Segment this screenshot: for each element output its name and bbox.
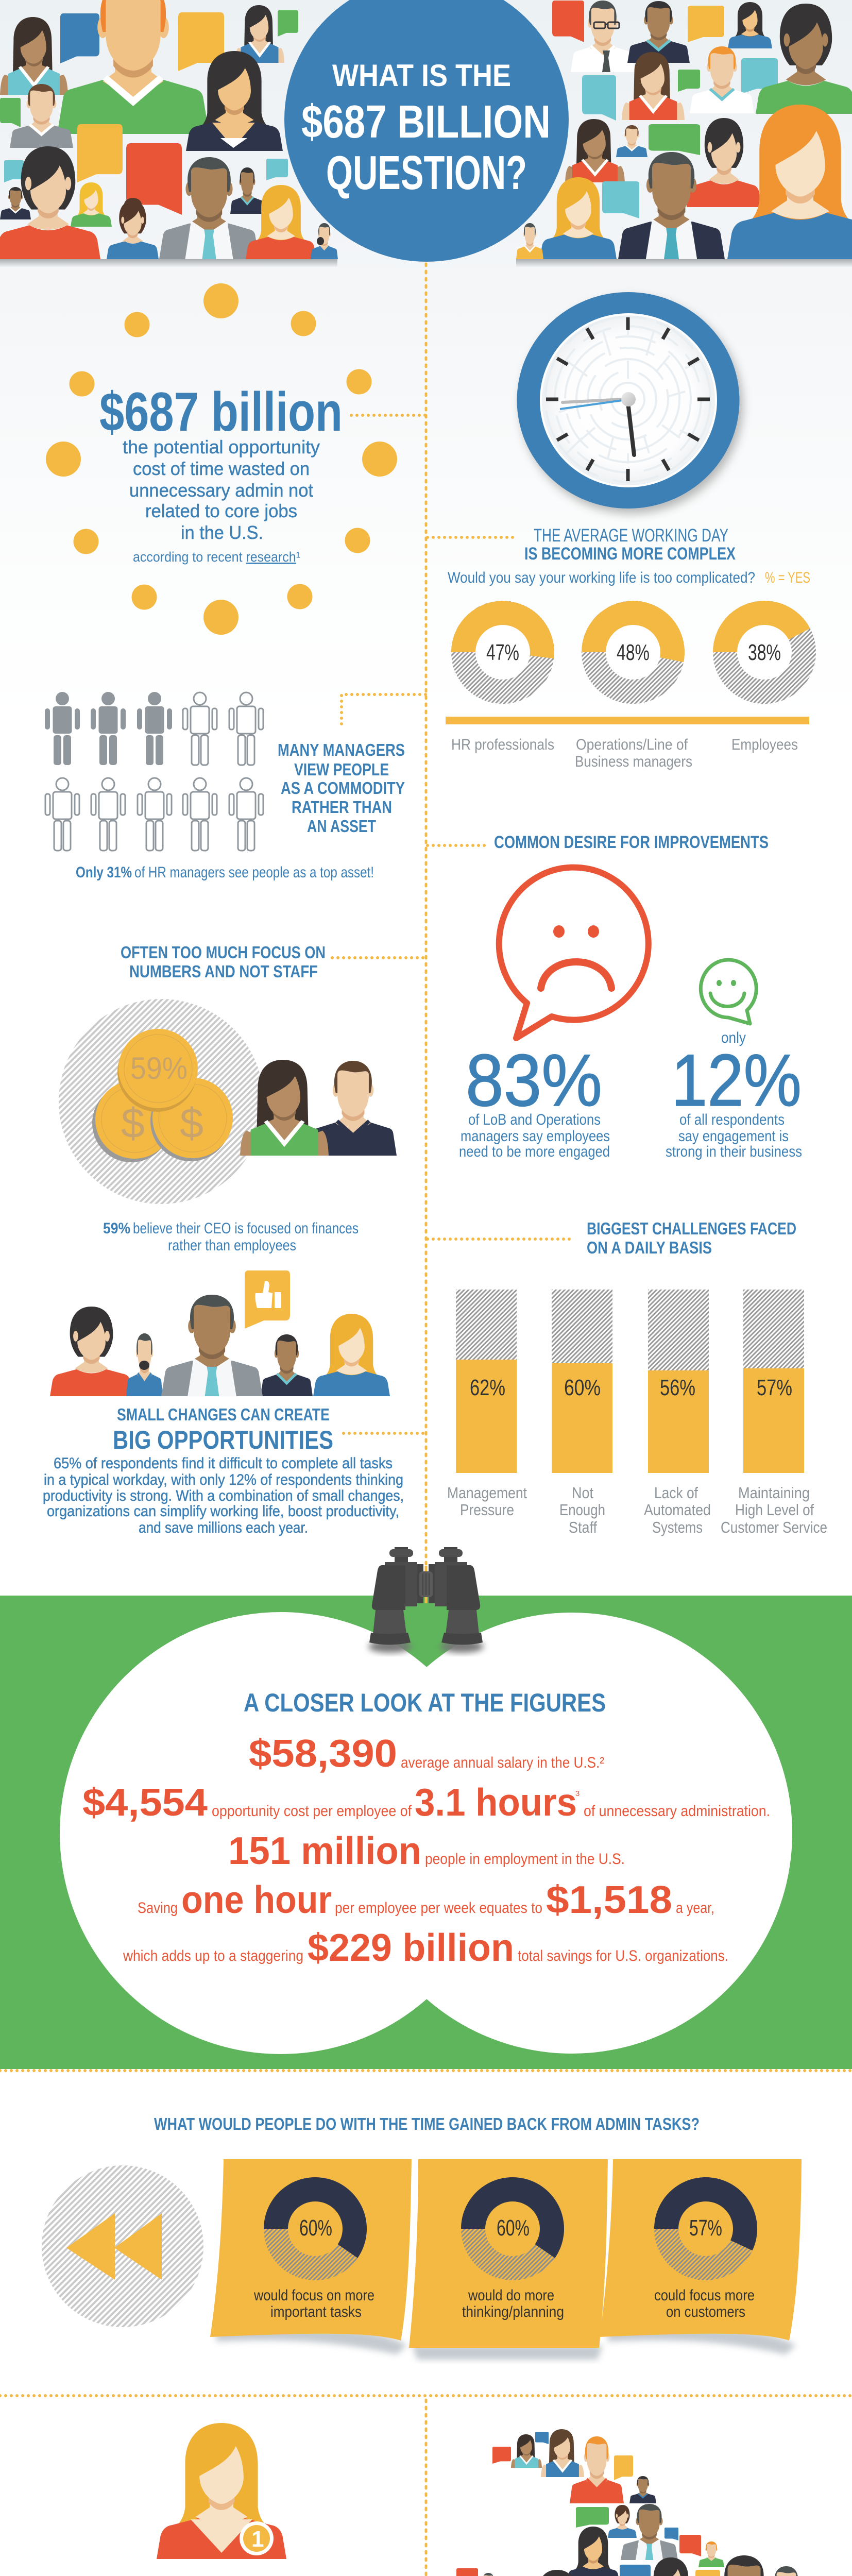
bar: Management Pressure 62%: 62% bbox=[470, 1375, 505, 1400]
chart: daily challenges bars bbox=[447, 1290, 827, 1536]
bar: Lack of Automated Systems 56%: Automated bbox=[644, 1501, 711, 1519]
stat: $687 billion bbox=[99, 381, 425, 565]
heading and text: big opportunities: productivity is strong. With a combination of small changes, bbox=[43, 1487, 404, 1504]
people collage shadow bbox=[0, 259, 852, 267]
stat: 83%: managers say employees bbox=[461, 1128, 610, 1145]
heading: too much focus on numbers bbox=[121, 943, 425, 981]
stat: 12%: 12% bbox=[671, 1040, 802, 1122]
stat: $687 billion: cost of time wasted on bbox=[133, 458, 310, 479]
heading: average working day: IS BECOMING MORE COMPLEX bbox=[524, 544, 736, 564]
figures: opportunity cost: opportunity cost per employee of bbox=[212, 1803, 412, 1820]
figures: total savings: total savings for U.S. organizations. bbox=[518, 1947, 728, 1964]
panel: sticky note 60% thinking: thinking/planning bbox=[462, 2303, 564, 2320]
text: 59% believe bbox=[103, 1220, 359, 1254]
heading: biggest challenges: BIGGEST CHALLENGES FACED bbox=[587, 1219, 796, 1238]
bar: Lack of Automated Systems 56%: 56% bbox=[660, 1375, 695, 1400]
stat: $687 billion: in the U.S. bbox=[181, 522, 263, 543]
text: many managers view people as a commodity: AS A COMMODITY bbox=[281, 778, 405, 798]
figures: one hour saving: one hour bbox=[181, 1878, 332, 1921]
heading: average working day: THE AVERAGE WORKING DAY bbox=[534, 526, 728, 546]
icon: ring of yellow dots bbox=[46, 283, 397, 635]
illustration: coins and people bbox=[59, 999, 397, 1204]
heading: biggest challenges bbox=[428, 1219, 796, 1257]
figures: opportunity cost: $4,554 bbox=[82, 1781, 208, 1824]
bar: Not Enough Staff 60%: Not bbox=[572, 1484, 593, 1502]
illustration: team with thumbs-up bubble bbox=[50, 1270, 390, 1396]
bar: Management Pressure 62%: Pressure bbox=[460, 1501, 514, 1519]
illustration: coins and people: $ bbox=[121, 1100, 145, 1147]
title circle: WHAT IS THE bbox=[332, 58, 511, 93]
illustration: woman with number one medal bbox=[157, 2423, 286, 2559]
stat: 83%: of LoB and Operations bbox=[468, 1111, 601, 1128]
illustration: coins and people: $ bbox=[180, 1100, 203, 1147]
bar: Lack of Automated Systems 56%: Systems bbox=[652, 1518, 703, 1536]
chart: complexity donuts bbox=[446, 601, 816, 770]
figures: one hour saving: per employee per week equates to bbox=[335, 1900, 542, 1917]
donut: HR professionals 47%: 47% bbox=[486, 640, 519, 665]
heading: average working day: Would you say your working life is too complicated? bbox=[448, 569, 755, 586]
bar: Not Enough Staff 60% bbox=[552, 1290, 612, 1536]
heading: average working day bbox=[428, 526, 810, 586]
text: many managers view people as a commodity: RATHER THAN bbox=[292, 798, 392, 817]
panel: sticky note 60% thinking: 60% bbox=[497, 2215, 530, 2241]
icon: binoculars bbox=[368, 1547, 484, 1653]
donut: Operations 48% bbox=[582, 601, 685, 704]
title circle: QUESTION? bbox=[326, 146, 527, 199]
heading: biggest challenges: ON A DAILY BASIS bbox=[587, 1238, 712, 1257]
figures: salary: $58,390 bbox=[249, 1732, 397, 1775]
stat: $687 billion: $687 billion bbox=[99, 381, 343, 443]
bar: Management Pressure 62% bbox=[447, 1290, 527, 1519]
stat: 83% bbox=[459, 1040, 610, 1160]
figures: total savings: $229 billion bbox=[308, 1926, 514, 1969]
figures: employment: 151 million bbox=[228, 1829, 421, 1872]
figures: opportunity cost bbox=[82, 1781, 770, 1824]
heading: too much focus on numbers: OFTEN TOO MUCH FOCUS ON bbox=[121, 943, 326, 962]
illustration: woman with number one medal: 1 bbox=[251, 2527, 264, 2552]
panel: sticky note 60% important tasks: important tasks bbox=[270, 2303, 362, 2320]
stat: 83%: 83% bbox=[466, 1040, 602, 1122]
illustration: coins and people: 59% bbox=[130, 1051, 188, 1086]
figures: total savings bbox=[123, 1926, 728, 1969]
text: only 31% of HR managers: of HR managers see people as a top asset! bbox=[134, 864, 374, 881]
chart: complexity donuts: Employees bbox=[731, 736, 798, 753]
text: 59% believe: rather than employees bbox=[168, 1237, 296, 1254]
illustration: right people collage bbox=[516, 1, 852, 259]
figures: salary bbox=[249, 1732, 604, 1775]
heading and text: big opportunities: SMALL CHANGES CAN CREATE bbox=[117, 1405, 330, 1424]
bar: Customer Service 57%: Customer Service bbox=[721, 1518, 827, 1536]
bar: Not Enough Staff 60%: 60% bbox=[564, 1375, 601, 1400]
figures: employment: people in employment in the U.S. bbox=[425, 1851, 625, 1868]
stat: 83%: need to be more engaged bbox=[459, 1143, 610, 1160]
text: many managers view people as a commodity: AN ASSET bbox=[307, 817, 376, 836]
figures: opportunity cost: 3 bbox=[575, 1789, 580, 1798]
donut: Employees 38% bbox=[713, 601, 816, 704]
bar: Not Enough Staff 60%: Enough bbox=[559, 1501, 605, 1519]
illustration: crowd of people with bubbles bbox=[456, 2429, 852, 2576]
chart: complexity donuts: Operations/Line of bbox=[576, 736, 688, 753]
icon: clock with maze face bbox=[517, 292, 743, 514]
heading and text: big opportunities: organizations can simplify working life, boost productivity, bbox=[47, 1503, 399, 1520]
text: 59% believe: believe their CEO is focused on finances bbox=[133, 1220, 359, 1237]
panel: sticky note 60% important tasks: would focus on more bbox=[253, 2287, 374, 2304]
figures: one hour saving: $1,518 bbox=[546, 1878, 672, 1921]
stat: 12%: of all respondents bbox=[679, 1111, 785, 1128]
panel: sticky note 60% thinking bbox=[409, 2159, 608, 2360]
figures: one hour saving bbox=[138, 1878, 714, 1921]
stat: $687 billion: the potential opportunity bbox=[123, 436, 320, 457]
icon: ten people, three filled bbox=[45, 692, 263, 851]
donut: Employees 38%: 38% bbox=[748, 640, 781, 665]
heading: average working day: % = YES bbox=[765, 569, 810, 586]
figures: opportunity cost: of unnecessary administration. bbox=[584, 1803, 770, 1820]
figures: opportunity cost: 3.1 hours bbox=[415, 1781, 577, 1824]
icon: smiling speech bubble bbox=[701, 960, 756, 1024]
stat: 12%: only bbox=[721, 1029, 746, 1046]
text: many managers view people as a commodity bbox=[278, 694, 425, 836]
stat: 12%: say engagement is bbox=[678, 1128, 789, 1145]
donut: HR professionals 47% bbox=[451, 601, 554, 704]
icon: sad speech bubble bbox=[499, 868, 649, 1038]
figures: total savings: which adds up to a staggering bbox=[123, 1947, 303, 1964]
text: only 31% of HR managers bbox=[76, 864, 374, 881]
timeline: central dashed line bbox=[424, 264, 428, 2576]
donut: Operations 48%: 48% bbox=[617, 640, 650, 665]
bar: Customer Service 57% bbox=[721, 1290, 827, 1536]
heading and text: big opportunities bbox=[43, 1405, 425, 1536]
text: 59% believe: 59% bbox=[103, 1220, 130, 1237]
heading: a closer look at the figures: A CLOSER LOOK AT THE FIGURES bbox=[244, 1688, 606, 1717]
stat: $687 billion: related to core jobs bbox=[145, 500, 297, 521]
chart: complexity donuts: HR professionals bbox=[451, 736, 554, 753]
text: many managers view people as a commodity: MANY MANAGERS bbox=[278, 740, 405, 759]
illustration: left people collage bbox=[0, 0, 338, 259]
panel: sticky note 60% thinking: would do more bbox=[468, 2287, 554, 2304]
heading and text: big opportunities: 65% of respondents find it difficult to complete all tasks bbox=[54, 1455, 393, 1472]
bar: Management Pressure 62%: Management bbox=[447, 1484, 527, 1502]
icon: rewind arrows bbox=[42, 2165, 203, 2327]
stat: 12% bbox=[666, 1029, 802, 1160]
panel: sticky note 57% customers: could focus more bbox=[654, 2287, 755, 2304]
heading and text: big opportunities: BIG OPPORTUNITIES bbox=[113, 1426, 333, 1454]
figures: salary: average annual salary in the U.S.² bbox=[401, 1754, 604, 1771]
bar: Customer Service 57%: Maintaining bbox=[738, 1484, 810, 1502]
panel: sticky note 57% customers: 57% bbox=[689, 2215, 722, 2241]
title circle: $687 BILLION bbox=[301, 96, 551, 148]
chart: complexity donuts: Business managers bbox=[575, 753, 692, 770]
panel: sticky note 57% customers: on customers bbox=[666, 2303, 745, 2320]
panel: sticky note 57% customers bbox=[600, 2159, 802, 2354]
stat: $687 billion: unnecessary admin not bbox=[129, 480, 313, 501]
text: only 31% of HR managers: Only 31% bbox=[76, 864, 132, 881]
heading and text: big opportunities: in a typical workday, with only 12% of respondents thinking bbox=[44, 1471, 403, 1488]
bar: Not Enough Staff 60%: Staff bbox=[569, 1518, 597, 1536]
panel: sticky note 60% important tasks: 60% bbox=[299, 2215, 332, 2241]
heading and text: big opportunities: and save millions each year. bbox=[139, 1519, 308, 1536]
figures: employment bbox=[228, 1829, 625, 1872]
heading: common desire for improvements: COMMON DESIRE FOR IMPROVEMENTS bbox=[494, 833, 769, 852]
figures: one hour saving: a year, bbox=[676, 1900, 714, 1917]
figures: one hour saving: Saving bbox=[138, 1900, 178, 1917]
bar: Customer Service 57%: 57% bbox=[757, 1375, 792, 1400]
title circle bbox=[284, 0, 569, 262]
bar: Lack of Automated Systems 56% bbox=[644, 1290, 711, 1536]
panel: sticky note 60% important tasks bbox=[210, 2159, 412, 2354]
heading: what would people do: WHAT WOULD PEOPLE DO WITH THE TIME GAINED BACK FROM ADMIN TASKS? bbox=[154, 2114, 700, 2133]
heading: too much focus on numbers: NUMBERS AND NOT STAFF bbox=[129, 962, 318, 981]
bar: Lack of Automated Systems 56%: Lack of bbox=[654, 1484, 698, 1502]
panel: green binocular view bbox=[0, 1596, 852, 2071]
stat: $687 billion: according to recent research¹ bbox=[133, 549, 300, 565]
text: many managers view people as a commodity: VIEW PEOPLE bbox=[294, 760, 389, 779]
stat: 12%: strong in their business bbox=[666, 1143, 802, 1160]
bar: Customer Service 57%: High Level of bbox=[735, 1501, 814, 1519]
